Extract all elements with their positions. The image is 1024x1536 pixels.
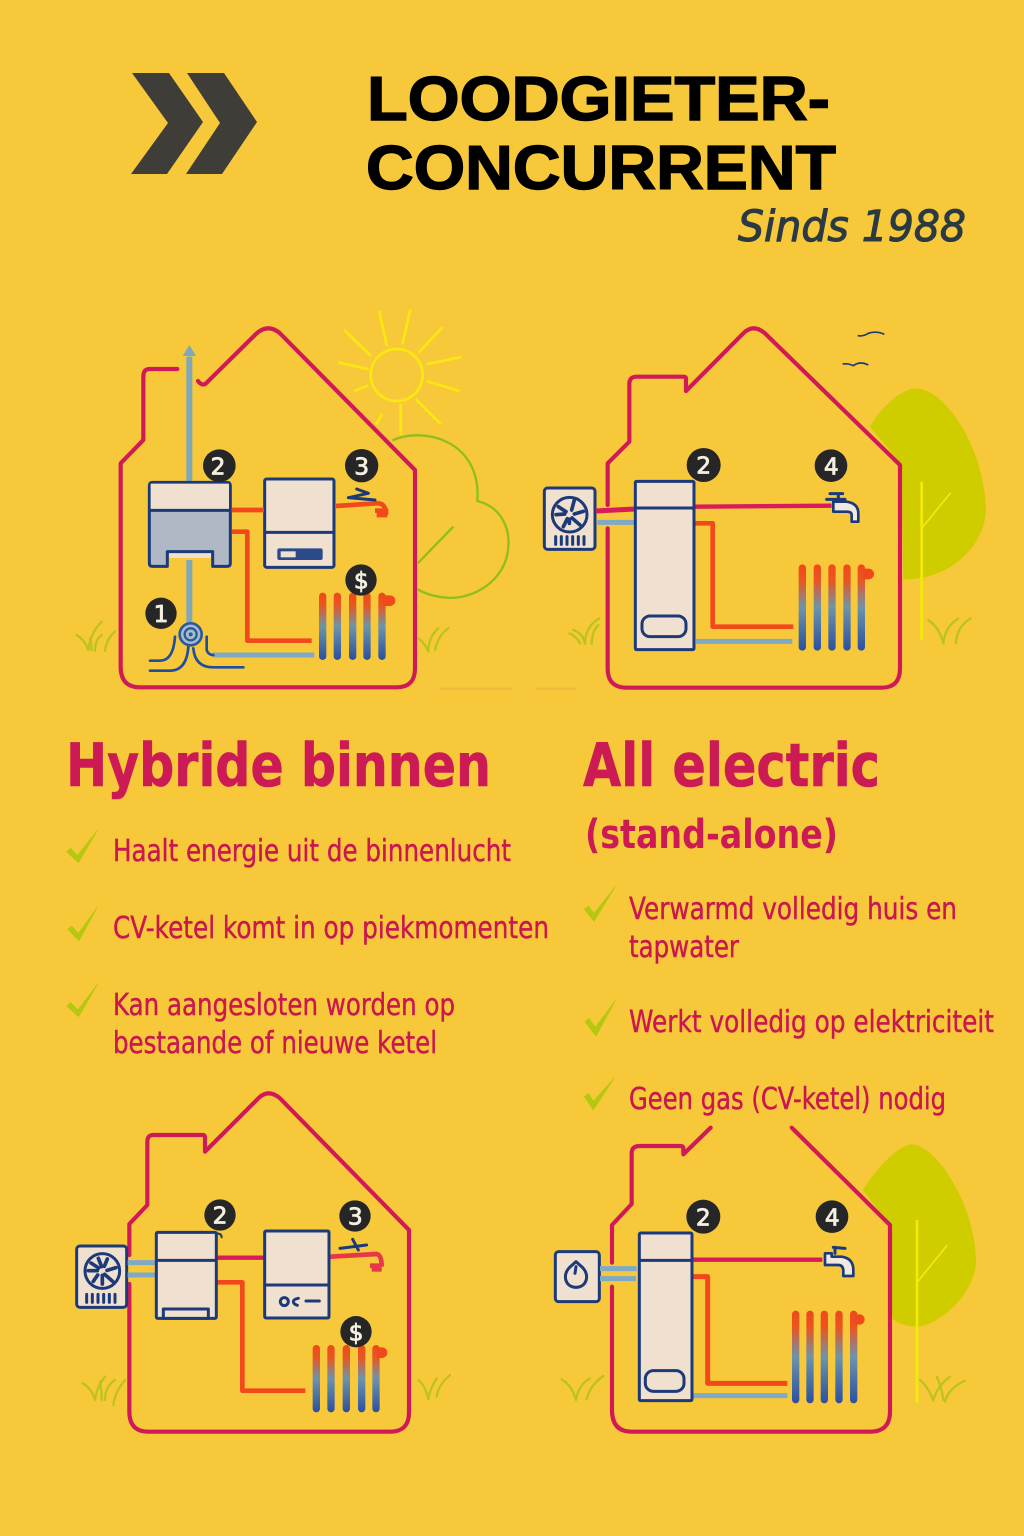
check item 1: Haalt energie uit de binnenlucht [113,834,511,869]
radiator [319,593,395,660]
heading: all electric: All electric [583,731,880,801]
number badge 3 [345,449,378,482]
title: LOODGIETER- [367,65,830,134]
check item 1: Verwarmd volledig huis en [629,892,957,927]
check item 2 [68,907,549,946]
pipes [600,1260,822,1396]
check item 1 [584,887,957,965]
number badge 3: 3 [354,452,369,480]
icon: grass [77,622,448,652]
outdoor heat pump [544,488,595,549]
check item 3: Kan aangesloten worden op [113,988,455,1023]
heat pump unit [149,482,230,566]
heading: all electric: (stand-alone) [585,812,838,858]
dollar badge [345,564,377,596]
icon: tap [827,494,858,522]
check item 2: CV-ketel komt in op piekmomenten [113,911,549,946]
number badge 2 [686,1200,720,1234]
number badge 3: 3 [348,1203,363,1231]
house outline [608,328,900,688]
logo: double chevron [131,73,257,174]
radiator [313,1345,387,1412]
panel: all electric diagram, top right [537,328,986,689]
pipes [596,506,832,641]
dollar badge [340,1316,372,1347]
outdoor heat pump [77,1246,127,1307]
pipes [128,1239,382,1391]
icon: outlined tree [393,435,509,598]
icon: grass [569,618,971,644]
title [366,65,836,203]
number badge 2 [687,448,721,482]
pipes [213,489,388,655]
number badge 1 [145,598,177,629]
number badge 3 [339,1200,371,1232]
storage tank unit [635,481,694,650]
control unit with drop icon [555,1252,599,1302]
icon: grass [83,1375,450,1405]
panel: all electric diagram with thermostat, bottom right [555,1128,976,1432]
number badge 2 [203,449,236,482]
tagline: Sinds 1988 [738,202,966,252]
icon: grass [562,1376,965,1402]
icon: ground source pump [150,623,243,671]
number badge 4 [815,449,847,482]
title: CONCURRENT [366,134,836,203]
heading: all electric [583,731,880,858]
dollar badge: $ [349,1318,363,1346]
panel: hybride diagram with outdoor unit, bottom left [77,1093,450,1432]
house outline [121,328,415,687]
flue pipe with arrow [183,345,196,623]
list: all electric benefits [584,887,994,1117]
check item 3 [584,1078,946,1117]
check item 3: bestaande of nieuwe ketel [113,1026,437,1061]
number badge 2: 2 [696,1203,711,1231]
check item 1 [67,830,511,869]
boiler [265,479,334,567]
number badge 4: 4 [825,1203,840,1231]
house outline [129,1093,409,1432]
radiator [792,1311,865,1403]
icon: filled tree [870,388,986,640]
list: hybride binnen benefits [67,830,549,1061]
icon: sun [339,311,460,433]
number badge 2: 2 [211,452,225,480]
heat pump indoor unit [156,1232,222,1318]
panel: hybride binnen diagram, top left [77,311,512,689]
check item 3 [67,984,455,1061]
heading: hybride binnen: Hybride binnen [66,731,491,801]
number badge 4 [816,1200,848,1233]
icon: filled tree [863,1144,976,1403]
boiler [265,1231,329,1318]
number badge 1: 1 [154,600,168,628]
dollar badge: $ [354,567,369,595]
radiator [799,564,874,651]
storage tank unit [639,1233,692,1401]
number badge 2: 2 [213,1202,227,1230]
number badge 2 [204,1199,236,1231]
number badge 2: 2 [696,452,711,480]
check item 1: tapwater [629,930,740,965]
icon: birds [843,332,884,366]
check item 3: Geen gas (CV-ketel) nodig [629,1082,946,1117]
house outline [612,1128,890,1432]
icon: tap [825,1247,853,1276]
number badge 4: 4 [824,452,839,480]
